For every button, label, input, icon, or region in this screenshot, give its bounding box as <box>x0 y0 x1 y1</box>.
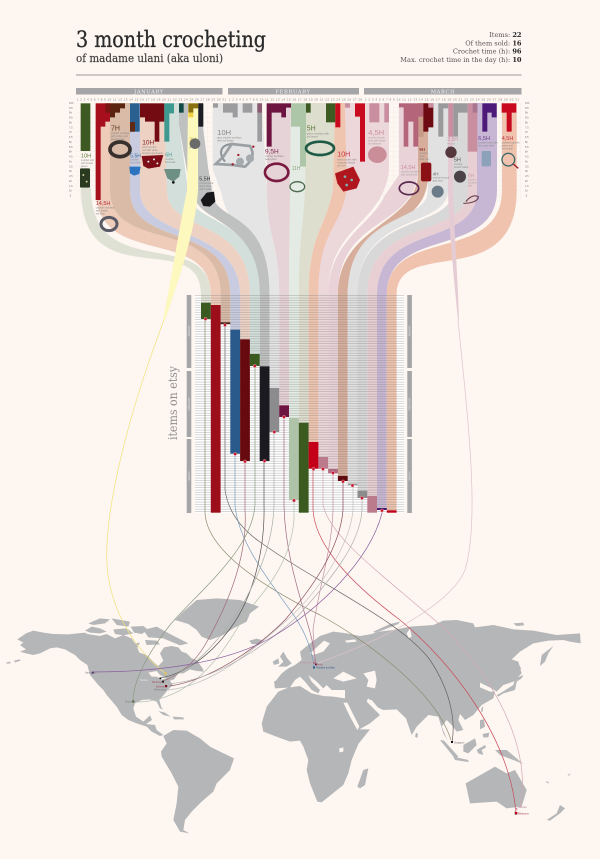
item descriptions: black white <box>199 185 212 188</box>
title: 3 month crocheting <box>76 28 266 53</box>
item hour labels: 5,5H <box>199 177 211 183</box>
summary stats: Crochet time (h): 96 <box>453 48 522 56</box>
item descriptions: with cotton and <box>111 135 128 138</box>
photo: teal bowl <box>164 169 181 184</box>
hours axes: 10h <box>69 101 74 105</box>
item descriptions: bowl crochet with <box>337 158 357 162</box>
hours axes <box>69 101 530 198</box>
item descriptions: crochet cuff <box>81 159 94 162</box>
photo: blue bowl <box>129 167 141 176</box>
item hour labels: 6,5H <box>478 136 490 142</box>
month side bars right: MARCH <box>408 471 411 480</box>
item descriptions: red beads <box>307 136 319 138</box>
photo: green cuff <box>80 168 90 188</box>
city dots and labels: Adelaide <box>518 806 528 809</box>
photo: red cuff <box>421 163 431 181</box>
crochet item photos left <box>80 138 305 231</box>
hours axes: .5 <box>525 194 528 198</box>
hours axes: .5 <box>69 194 72 198</box>
hours axes: 10h <box>525 101 530 105</box>
title: of madame ulani (aka uloni) <box>76 51 223 65</box>
item descriptions: turquoise beads <box>337 162 356 164</box>
hours axes: 3.5 <box>69 164 73 168</box>
city dots and labels: Melbourne <box>518 812 530 816</box>
hours axes: 9.5 <box>69 106 73 110</box>
photo: red bowl <box>335 167 360 192</box>
summary stats <box>400 31 522 64</box>
day numbers <box>77 98 519 102</box>
item descriptions: with red beads <box>217 140 234 142</box>
hours axes: 9.5 <box>525 106 529 110</box>
city dots and labels: Washington <box>154 688 167 692</box>
city dots and labels: Houston <box>125 700 134 704</box>
item descriptions: bowl <box>419 155 425 158</box>
item descriptions: necklace <box>468 182 478 184</box>
city dots and labels: Frankfurt am Main <box>316 666 335 670</box>
item hour labels: 4,5H <box>368 128 384 137</box>
map: eurasia, africa, oceania <box>262 620 581 821</box>
hours axes: 2.5 <box>69 174 73 178</box>
month side bars right: JANUARY <box>408 325 411 337</box>
month side bars right: FEBRUARY <box>408 397 411 410</box>
photo: black bowl <box>201 192 215 207</box>
item descriptions: dark <box>447 146 453 148</box>
item hour labels: 14,5H <box>96 201 110 207</box>
hours axes: 9h <box>69 111 72 115</box>
item descriptions: pink <box>468 184 473 188</box>
item descriptions: red with white <box>142 149 158 152</box>
photo: teal bracelet <box>502 153 518 168</box>
item descriptions: grey blue <box>433 180 444 182</box>
item descriptions: dark red <box>419 158 429 161</box>
item descriptions: blue and white <box>478 144 495 148</box>
item hour labels: 10H <box>142 139 155 146</box>
hours axes: 4h <box>525 159 528 163</box>
month side bars left: FEBRUARY <box>188 397 191 410</box>
item hour labels: 2H <box>189 138 196 144</box>
hours axes: 7h <box>525 130 528 134</box>
day numbers: 1 2 3 4 5 6 7 8 9 10 11 12 13 14 15 16 17 18 19 20 21 22 23 24 25 26 27 28 <box>229 98 362 102</box>
item descriptions: green <box>81 165 88 168</box>
item hour labels: 7H <box>111 126 120 133</box>
funnel hatch lines <box>195 295 404 513</box>
item descriptions: bead plum <box>265 158 277 161</box>
photo: plum ring <box>265 164 288 181</box>
pink thin flow band <box>448 103 459 320</box>
photo: blue cuff <box>482 151 491 166</box>
hours axes: 5.5 <box>525 145 529 149</box>
photo: plum ring <box>399 182 419 195</box>
month header bars <box>76 88 522 95</box>
item descriptions: crochet necklace <box>111 132 130 135</box>
item descriptions: brooch <box>447 142 456 146</box>
day numbers: 1 2 3 4 5 6 7 8 9 10 11 12 13 14 15 16 17 18 19 20 21 22 23 24 25 26 27 28 29 30 31 <box>365 98 519 102</box>
photo: green necklace <box>306 142 334 155</box>
summary stats: Of them sold: 16 <box>465 39 522 47</box>
world map <box>6 598 581 833</box>
hours axes: 2h <box>69 179 72 183</box>
hours axes: 8h <box>525 120 528 124</box>
hours axes: 1h <box>525 189 528 193</box>
photo: grey blue brooch <box>432 186 444 198</box>
hours axes: 3h <box>525 169 528 173</box>
photo: pink necklace <box>463 196 478 203</box>
item descriptions: with beads pink <box>401 174 419 176</box>
hours axes: 1h <box>69 189 72 193</box>
hours axes: 3h <box>69 169 72 173</box>
item hour labels: 14,5H <box>401 165 415 171</box>
calendar blocks left <box>81 103 300 200</box>
hours axes: 3.5 <box>525 164 529 168</box>
item descriptions: with beads <box>81 162 94 165</box>
hours axes: 5h <box>525 150 528 154</box>
item descriptions: bowl blue <box>130 162 141 164</box>
item hour labels: 10H <box>337 152 350 159</box>
item hour labels <box>81 126 513 207</box>
item hour labels: 5H <box>307 126 316 133</box>
hours axes: 8.5 <box>69 116 73 120</box>
hours axes: 6.5 <box>69 135 73 139</box>
month side bars left: JANUARY <box>188 325 191 337</box>
item descriptions: crochet <box>468 178 476 182</box>
month header bars: MARCH <box>431 89 455 95</box>
title <box>76 28 266 65</box>
item hour labels: 9,5H <box>265 148 279 155</box>
month header bars: FEBRUARY <box>275 89 311 95</box>
item descriptions: bowl teal <box>165 161 176 164</box>
item hour labels: 4H <box>433 171 438 176</box>
photo: dark necklace <box>110 142 130 157</box>
hours axes: 2.5 <box>525 174 529 178</box>
hours axes: 5.5 <box>69 145 73 149</box>
item descriptions: and red <box>337 164 346 168</box>
item descriptions <box>81 132 520 216</box>
hours axes: 6h <box>69 140 72 144</box>
item hour labels: 9H <box>468 173 474 179</box>
item descriptions: crochet brooch <box>433 176 450 180</box>
item descriptions: with beads <box>199 188 212 191</box>
yellow flow band <box>163 103 198 320</box>
item descriptions: brooch <box>189 143 198 146</box>
item hour labels: 3,5H <box>447 137 458 143</box>
item descriptions: red beads <box>502 148 514 150</box>
item descriptions: and flowers <box>368 142 382 146</box>
item descriptions: crochet <box>454 163 463 166</box>
city dots and labels: Singapore <box>454 742 465 744</box>
hours axes: 1.5 <box>69 184 73 188</box>
photo: black grey brooch <box>454 171 466 183</box>
hours axes: 7h <box>69 130 72 134</box>
item descriptions: crochet bowl with <box>478 142 498 144</box>
summary stats: Items: 22 <box>489 31 522 39</box>
item hour labels: 6H <box>165 153 172 159</box>
item hour labels: 9H <box>419 147 425 152</box>
month header bars: JANUARY <box>133 89 164 95</box>
month side bars left: MARCH <box>188 471 191 480</box>
item descriptions: crochet <box>165 158 174 161</box>
item descriptions: brooch black <box>454 166 469 169</box>
photo: striped ring <box>101 217 117 231</box>
hours axes: 4.5 <box>525 155 529 159</box>
month side bars left <box>187 295 191 513</box>
hours axes: 4.5 <box>69 155 73 159</box>
day numbers: 1 2 3 4 5 6 7 8 9 10 11 12 13 14 15 16 17 18 19 20 21 22 23 24 25 26 27 28 29 30 31 <box>77 98 226 102</box>
item hour labels: 10H <box>217 128 231 137</box>
city dots and labels: Pittsburgh <box>152 681 163 684</box>
hours axes: 4h <box>69 159 72 163</box>
hours axes: 9h <box>525 111 528 115</box>
item descriptions: crochet bowl <box>199 182 214 185</box>
listing sale markers <box>204 317 384 512</box>
etsy listing bars <box>201 303 397 513</box>
item descriptions: grey crochet necklace <box>217 136 242 140</box>
photo: grey necklace <box>216 144 254 167</box>
item descriptions: green necklace with <box>307 132 329 136</box>
item descriptions: wood beads <box>111 138 125 141</box>
photo: red bowl <box>142 155 163 169</box>
item descriptions: bowl crochet <box>142 146 157 149</box>
city dots and labels: Baltimore <box>156 686 166 688</box>
item hour labels: 10H <box>81 154 91 160</box>
item descriptions: green and <box>502 144 514 148</box>
city dots and labels <box>85 662 530 816</box>
summary stats: Max. crochet time in the day (h): 10 <box>400 56 522 64</box>
city dots and labels: Vancouver <box>85 672 96 674</box>
hours axes: 6h <box>525 140 528 144</box>
crochet item photos right <box>306 142 518 203</box>
item hour labels: 11H <box>292 166 301 172</box>
rotated label: items on etsy: items on etsy <box>166 366 180 440</box>
map: americas and arctic <box>6 598 292 833</box>
item descriptions: grey <box>189 146 195 149</box>
calendar blocks right <box>300 103 516 167</box>
hours axes: 8h <box>69 120 72 124</box>
item descriptions: crochet necklace <box>401 170 420 174</box>
item descriptions: crochet brooch <box>368 136 385 140</box>
city dots and labels: Berlin <box>317 664 324 666</box>
hours axes: 2h <box>525 179 528 183</box>
flow bands from calendar to funnel <box>81 103 517 510</box>
item hour labels: 5H <box>454 158 461 164</box>
hours axes: 1.5 <box>525 184 529 188</box>
shipping route lines <box>93 319 523 813</box>
item descriptions: crochet <box>130 158 139 162</box>
item descriptions: crochet bracelet <box>502 142 520 144</box>
item descriptions: crochet necklace <box>265 155 284 158</box>
photo: sage ring <box>290 182 305 192</box>
item descriptions: pink with beads <box>368 140 386 142</box>
hours axes: 8.5 <box>525 116 529 120</box>
city dots and labels: Toronto <box>140 679 148 682</box>
hours axes: 6.5 <box>525 135 529 139</box>
item descriptions: buttons and beads <box>142 152 164 155</box>
item hour labels: 4,5H <box>502 136 513 142</box>
photo: grey brooch <box>190 138 200 149</box>
item descriptions: red blue <box>96 212 105 216</box>
hours axes: 7.5 <box>69 125 73 129</box>
photo: pink brooch <box>368 146 387 163</box>
city dots and labels: Amsterdam <box>300 662 312 664</box>
item hour labels: 5,5H <box>130 153 141 159</box>
item descriptions: with beads <box>96 210 108 212</box>
item descriptions: crochet necklace <box>96 206 115 210</box>
hours axes: 7.5 <box>525 125 529 129</box>
month side bars right <box>407 295 412 513</box>
item descriptions: crochet <box>419 152 428 155</box>
hours axes: 5h <box>69 150 72 154</box>
photo: dark brooch <box>445 147 457 158</box>
